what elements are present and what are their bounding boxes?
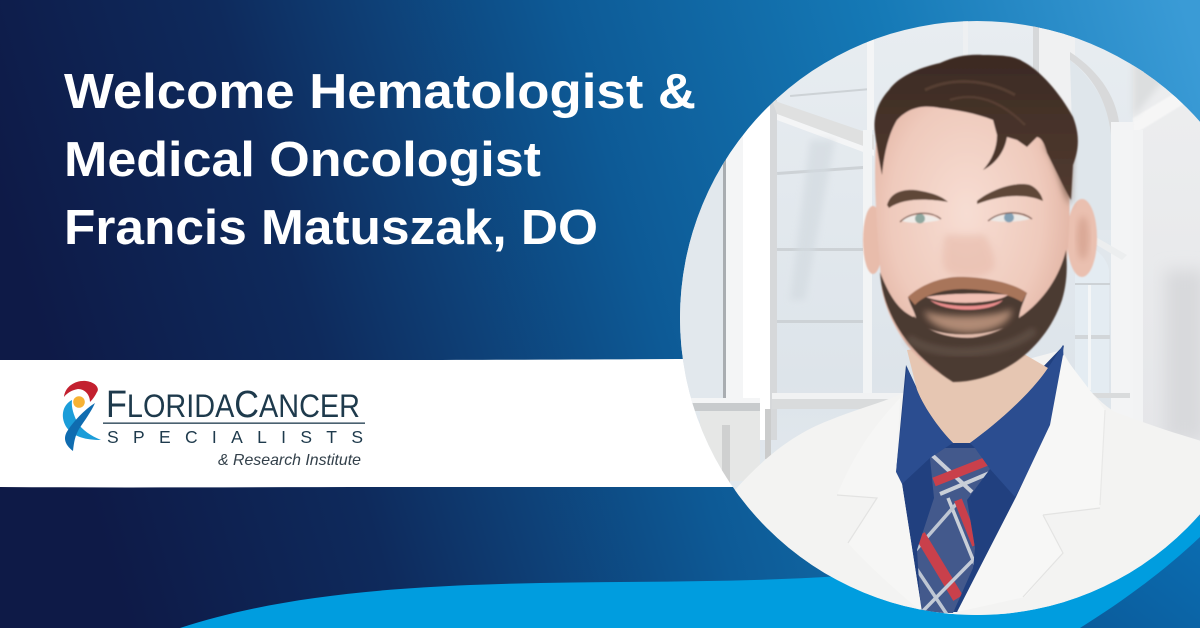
photo: window background	[680, 20, 1200, 620]
title	[64, 65, 696, 255]
blue shirt	[896, 345, 1064, 612]
bottom light blue wave	[180, 517, 1200, 628]
logo wordmark: FLORIDACANCER	[106, 384, 360, 426]
mouth	[926, 294, 1008, 303]
white logo band	[0, 359, 760, 487]
temple fade	[1045, 125, 1072, 205]
title: Medical Oncologist	[64, 133, 541, 187]
face	[875, 92, 1070, 380]
beard grey streak	[908, 330, 1035, 352]
moustache	[908, 277, 1027, 305]
plaid tie	[917, 448, 990, 613]
eyebrows	[887, 190, 948, 208]
beard	[880, 250, 1067, 382]
white lab coat	[735, 350, 1200, 628]
eyes	[902, 215, 940, 223]
icon: ribbon figure	[63, 381, 101, 451]
muntins	[777, 88, 872, 323]
logo subtitle: SPECIALISTS	[107, 427, 363, 447]
title: Welcome Hematologist &	[64, 65, 696, 119]
logo: Florida Cancer Specialists	[63, 381, 365, 469]
neck	[907, 340, 1048, 443]
chin beard fill	[912, 316, 1022, 340]
right frames	[1033, 26, 1039, 73]
sill	[690, 398, 760, 403]
angled sash	[772, 100, 874, 150]
coat lapels	[837, 355, 1105, 612]
nose shadow	[943, 235, 994, 278]
left frames	[680, 161, 725, 359]
head	[863, 55, 1097, 382]
circular doctor portrait	[680, 20, 1200, 628]
logo tagline: & Research Institute	[218, 452, 361, 469]
ears	[863, 206, 883, 274]
shadow in panes	[794, 139, 833, 296]
shirt collars	[896, 345, 1064, 497]
title: Francis Matuszak, DO	[64, 201, 598, 255]
hair	[875, 55, 1078, 200]
under-lip area	[924, 309, 1012, 333]
bottom right dark blue wedge	[1080, 537, 1200, 628]
